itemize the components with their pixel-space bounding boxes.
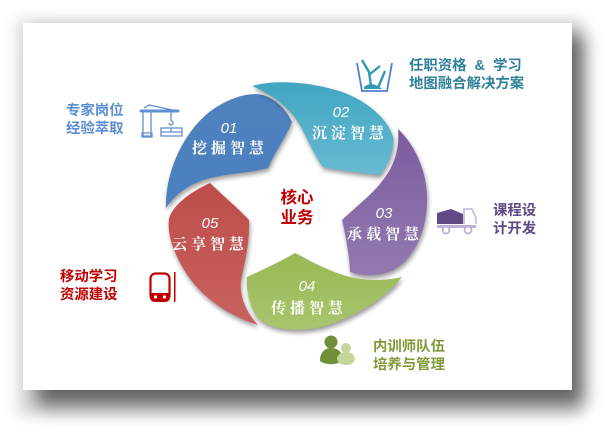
- segment 03 purple: 承载智慧: [347, 225, 423, 243]
- segment 01 blue: 挖掘智慧: [192, 139, 268, 157]
- segment 02 teal: 02: [333, 104, 350, 121]
- icon: crane: [141, 105, 182, 137]
- callout: bottom: 内训师队伍: [373, 337, 445, 355]
- segment 01 blue: [166, 94, 293, 211]
- segment 01 blue: 01: [221, 120, 237, 137]
- center label: 核心: [280, 187, 314, 207]
- callout: right: 计开发: [493, 219, 537, 237]
- segment 04 green: 传播智慧: [271, 299, 347, 317]
- callout: top right: 任职资格 & 学习: [409, 56, 522, 74]
- segment 05 red: 云享智慧: [172, 235, 248, 253]
- segment 02 teal: 沉淀智慧: [312, 124, 388, 142]
- icon: people: [320, 336, 355, 365]
- icon: bucket: [357, 60, 392, 91]
- segment 03 purple: [342, 129, 428, 278]
- segment 02 teal: [252, 82, 394, 178]
- card shadow: [36, 34, 584, 406]
- callout: right: 课程设: [493, 202, 537, 219]
- icon: truck: [437, 209, 476, 234]
- segment 04 green: 04: [299, 278, 315, 295]
- callout: top left: 专家岗位: [66, 101, 124, 119]
- segment 05 red: [169, 183, 259, 328]
- callout: left: 移动学习: [60, 267, 118, 285]
- callout: top left: 经验萃取: [66, 119, 124, 137]
- callout: top left: [66, 101, 124, 137]
- white card panel: [23, 23, 572, 390]
- icon: tram: [150, 272, 176, 302]
- callout: bottom: [373, 337, 446, 373]
- center label: 业务: [280, 208, 314, 227]
- callout: top right: 地图融合解决方案: [409, 74, 525, 92]
- segment 05 red: 05: [202, 215, 219, 232]
- segment 04 green: [247, 253, 403, 333]
- callout: left: 资源建设: [60, 285, 118, 303]
- cycle diagram: [166, 82, 428, 333]
- callout: right: [493, 202, 537, 237]
- callout: top right: [409, 56, 525, 92]
- callout: left: [60, 267, 118, 303]
- segment 03 purple: 03: [376, 205, 393, 222]
- callout: bottom: 培养与管理: [373, 355, 446, 373]
- center label: [280, 187, 314, 227]
